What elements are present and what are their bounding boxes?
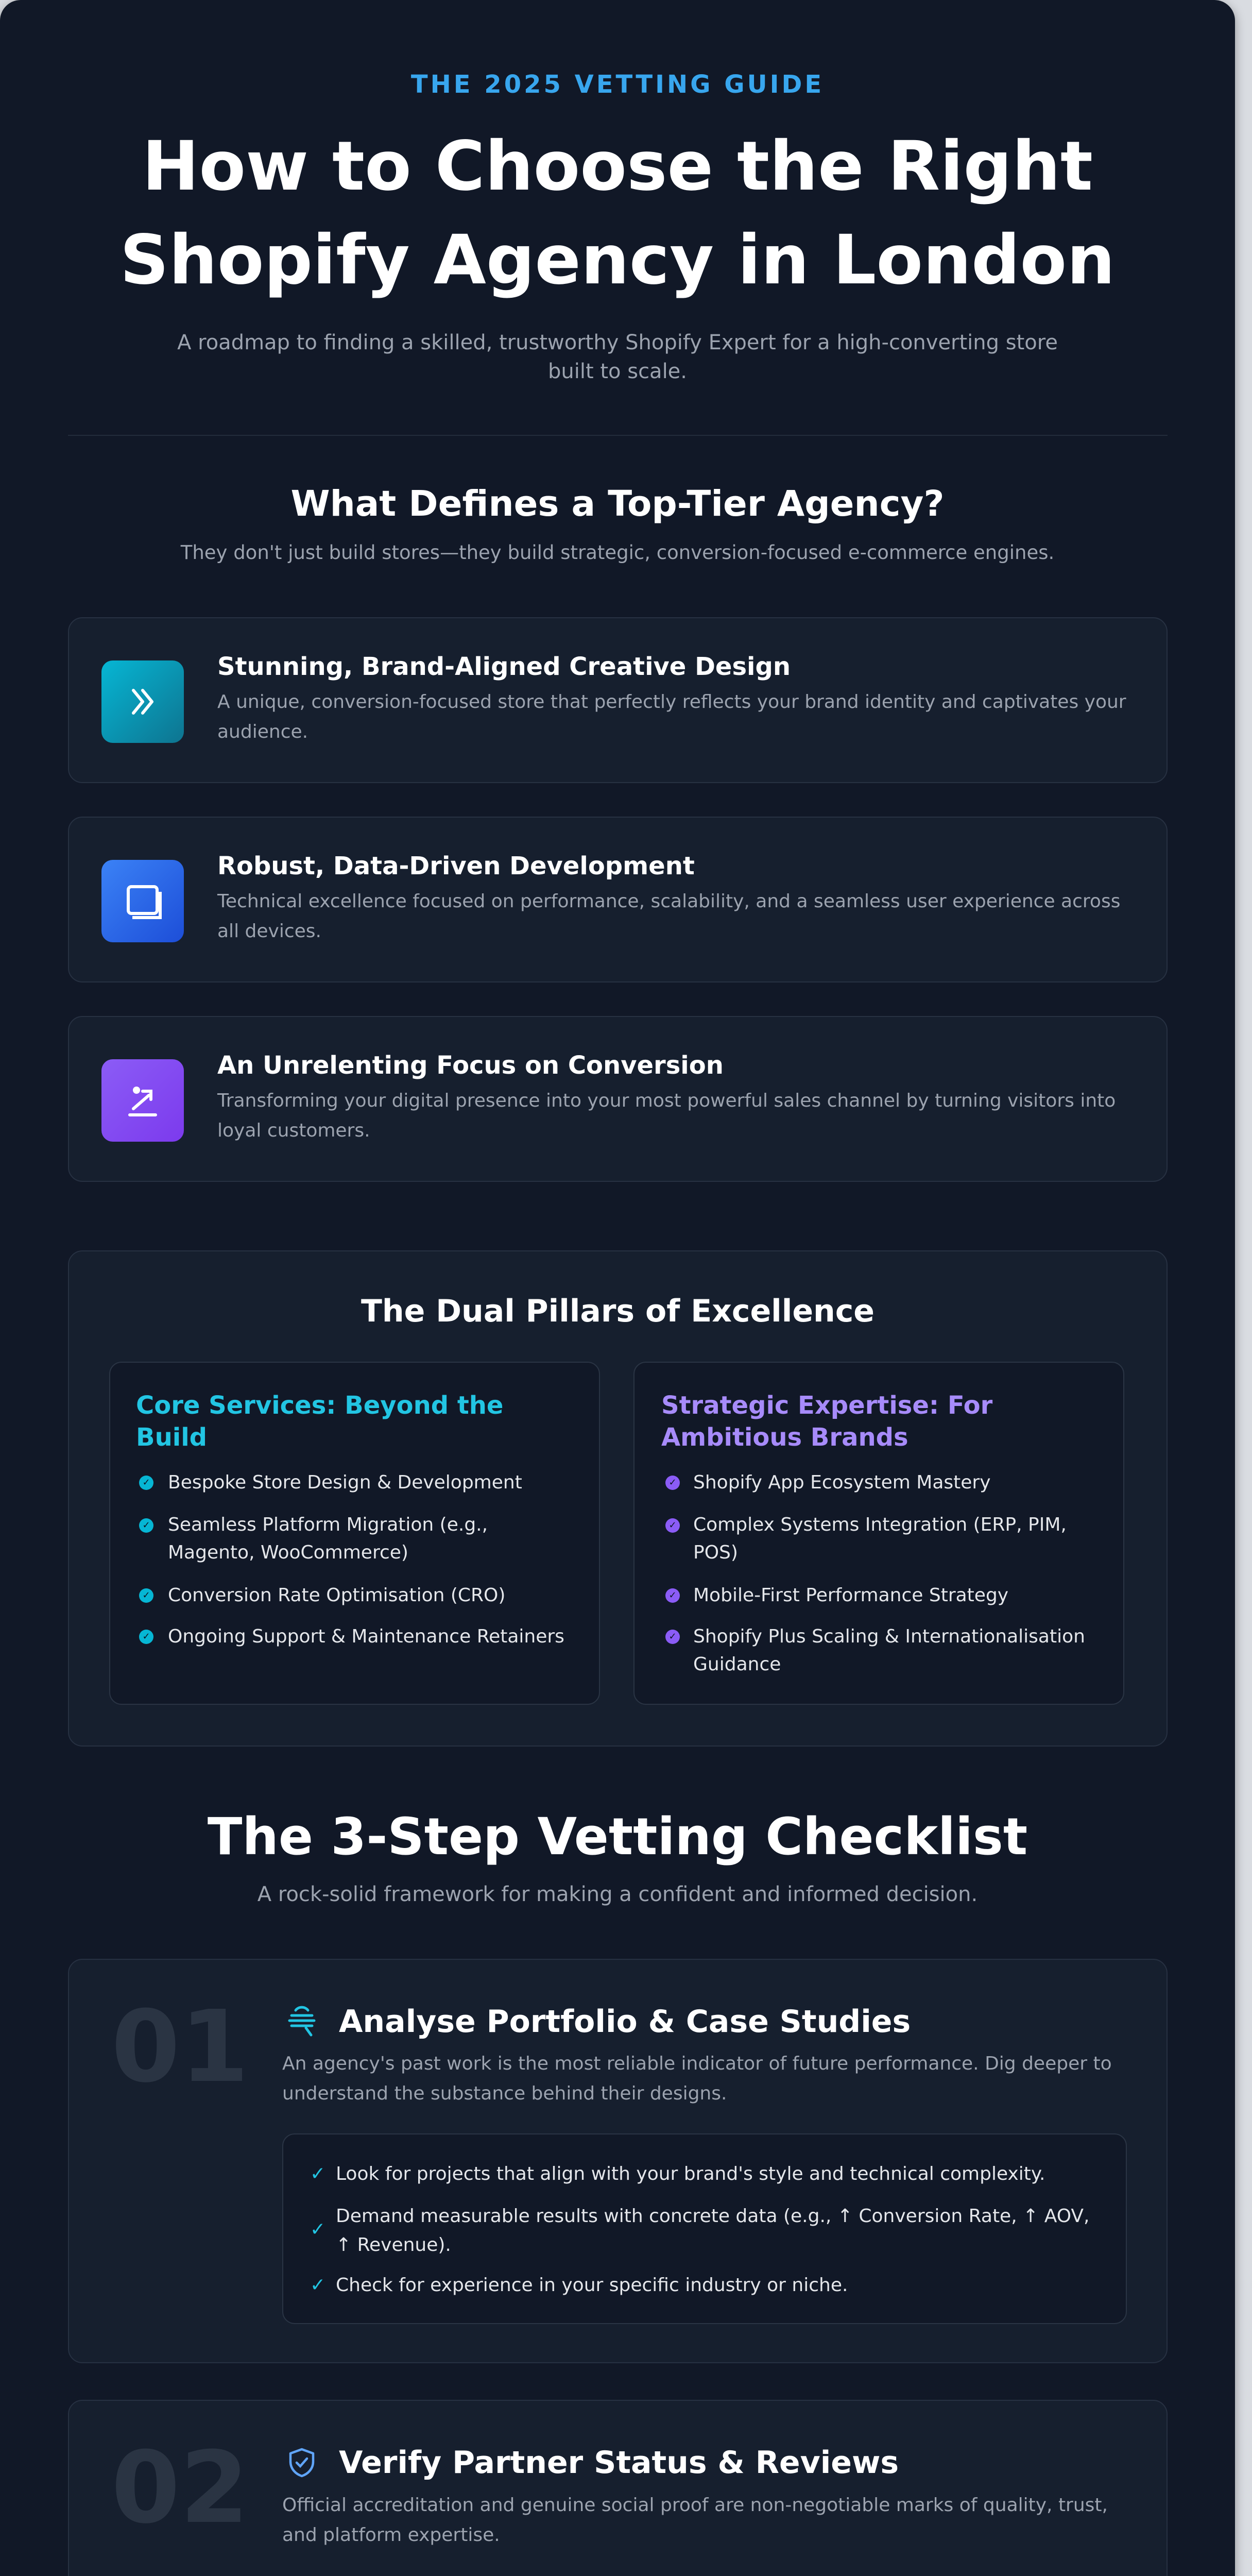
description: Technical excellence focused on performance, scalability, and a seamless user experience across bbox=[217, 891, 1120, 912]
icon: growth bbox=[101, 1059, 184, 1142]
list: ✓ bbox=[668, 1520, 677, 1531]
list: Complex Systems Integration (ERP, PIM, bbox=[693, 1514, 1067, 1535]
step 1 card bbox=[68, 1959, 1168, 2363]
list: ✓ bbox=[668, 1477, 677, 1488]
checklist box bbox=[282, 2133, 1127, 2324]
card: development bbox=[68, 817, 1168, 982]
subtitle bbox=[177, 331, 1058, 383]
list: ✓ bbox=[142, 1590, 150, 1601]
card: conversion bbox=[68, 1016, 1168, 1182]
step title: Verify Partner Status & Reviews bbox=[339, 2445, 899, 2481]
heading: Build bbox=[136, 1423, 207, 1452]
heading: Ambitious Brands bbox=[661, 1423, 908, 1452]
list: ✓ bbox=[142, 1631, 150, 1642]
checklist box: ↑ Revenue). bbox=[336, 2234, 451, 2256]
list: Mobile-First Performance Strategy bbox=[693, 1585, 1008, 1606]
checklist box: Demand measurable results with concrete data (e.g., ↑ Conversion Rate, ↑ AOV, bbox=[336, 2206, 1089, 2227]
title: Robust, Data-Driven Development bbox=[217, 852, 695, 880]
checklist box: ✓ bbox=[310, 2275, 325, 2296]
description: Transforming your digital presence into your most powerful sales channel by turning visitors into bbox=[217, 1090, 1116, 1111]
title bbox=[120, 127, 1115, 300]
description: loyal customers. bbox=[217, 1120, 370, 1141]
card: creative design bbox=[68, 617, 1168, 783]
number 02: 02 bbox=[111, 2431, 249, 2546]
section heading: top-tier agency: What Defines a Top-Tier Agency? bbox=[290, 483, 945, 524]
step title: Analyse Portfolio & Case Studies bbox=[339, 2004, 911, 2040]
heading bbox=[661, 1391, 993, 1452]
list: Magento, WooCommerce) bbox=[168, 1542, 408, 1563]
heading: Core Services: Beyond the bbox=[136, 1391, 503, 1420]
step description bbox=[282, 2053, 1112, 2104]
list: Ongoing Support & Maintenance Retainers bbox=[168, 1626, 564, 1647]
list: Shopify Plus Scaling & Internationalisation bbox=[693, 1626, 1085, 1647]
title: How to Choose the Right bbox=[142, 127, 1093, 206]
step 2 card bbox=[68, 2400, 1168, 2576]
description: audience. bbox=[217, 721, 308, 742]
list: ✓ bbox=[668, 1590, 677, 1601]
panel: dual pillars bbox=[68, 1250, 1168, 1747]
section subtitle: They don't just build stores—they build strategic, conversion-focused e-commerce engines. bbox=[181, 541, 1054, 564]
list: Bespoke Store Design & Development bbox=[168, 1472, 522, 1493]
list: Shopify App Ecosystem Mastery bbox=[693, 1472, 991, 1493]
icon: shield check bbox=[289, 2448, 314, 2477]
panel heading: The Dual Pillars of Excellence bbox=[361, 1293, 874, 1329]
step description: and platform expertise. bbox=[282, 2524, 500, 2546]
list: POS) bbox=[693, 1542, 738, 1563]
icon: layers search bbox=[288, 2006, 315, 2036]
subtitle: built to scale. bbox=[548, 360, 687, 383]
sub-panel: core services bbox=[109, 1362, 600, 1705]
checklist box: Look for projects that align with your brand's style and technical complexity. bbox=[336, 2163, 1045, 2184]
heading: Strategic Expertise: For bbox=[661, 1391, 992, 1420]
step description: Official accreditation and genuine social proof are non-negotiable marks of quality, trust, bbox=[282, 2495, 1108, 2516]
icon: chevrons bbox=[101, 660, 184, 743]
list: ✓ bbox=[142, 1520, 150, 1531]
list: Guidance bbox=[693, 1654, 781, 1675]
checklist box: Check for experience in your specific industry or niche. bbox=[336, 2275, 848, 2296]
list: Conversion Rate Optimisation (CRO) bbox=[168, 1585, 505, 1606]
step description: An agency's past work is the most reliable indicator of future performance. Dig deeper to bbox=[282, 2053, 1112, 2074]
title: An Unrelenting Focus on Conversion bbox=[217, 1051, 724, 1080]
checklist box: ✓ bbox=[310, 2163, 325, 2184]
description: A unique, conversion-focused store that perfectly reflects your brand identity and captivates your bbox=[217, 691, 1126, 713]
list: Seamless Platform Migration (e.g., bbox=[168, 1514, 488, 1535]
description bbox=[217, 1090, 1116, 1141]
list: ✓ bbox=[668, 1631, 677, 1642]
step description bbox=[282, 2495, 1108, 2546]
subtitle: A roadmap to finding a skilled, trustworthy Shopify Expert for a high-converting store bbox=[177, 331, 1058, 354]
description bbox=[217, 691, 1126, 742]
section subtitle: A rock-solid framework for making a confident and informed decision. bbox=[258, 1883, 977, 1906]
heading bbox=[136, 1391, 503, 1452]
description: all devices. bbox=[217, 921, 321, 942]
list: ✓ bbox=[142, 1477, 150, 1488]
number 01: 01 bbox=[111, 1990, 249, 2105]
eyebrow label: THE 2025 VETTING GUIDE bbox=[411, 70, 824, 99]
list bbox=[139, 1472, 564, 1647]
title: Shopify Agency in London bbox=[120, 221, 1115, 300]
step description: understand the substance behind their designs. bbox=[282, 2083, 727, 2104]
sub-panel: strategic expertise bbox=[633, 1362, 1124, 1705]
description bbox=[217, 891, 1120, 942]
list bbox=[665, 1472, 1085, 1675]
title: Stunning, Brand-Aligned Creative Design bbox=[217, 652, 791, 681]
section heading: checklist: The 3-Step Vetting Checklist bbox=[208, 1807, 1027, 1867]
checklist box: ✓ bbox=[310, 2219, 325, 2240]
icon: window bbox=[101, 860, 184, 942]
